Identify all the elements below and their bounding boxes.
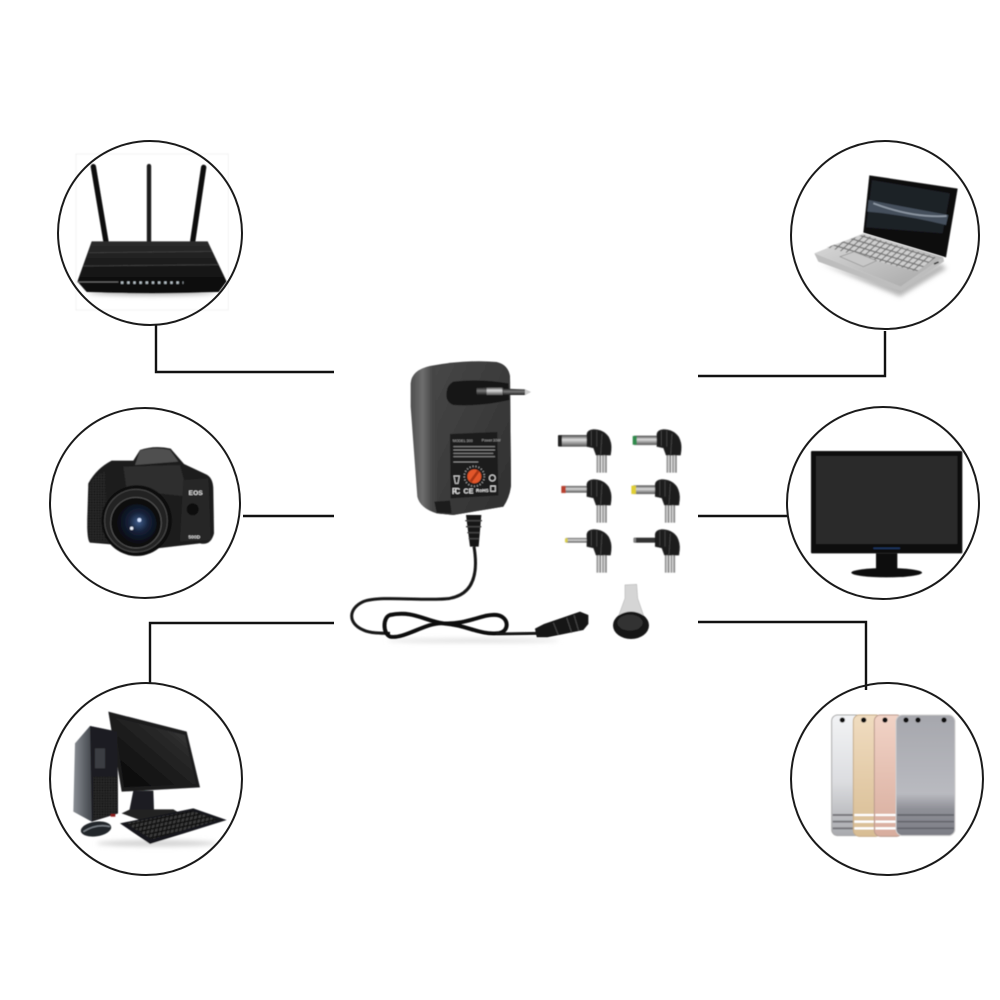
tip adapter key <box>613 584 649 639</box>
phone: silver <box>832 715 862 836</box>
adapter body <box>411 361 531 515</box>
rating label: CE <box>463 486 474 495</box>
rating label: Power:30W <box>482 438 501 442</box>
panel: smartphones <box>791 683 983 875</box>
rating label: MODEL:300 <box>453 439 473 443</box>
plug <box>446 380 531 405</box>
phone: gold <box>853 715 882 836</box>
rating label <box>450 432 501 498</box>
panel: monitor <box>787 407 979 599</box>
panel: power adapter with tips <box>352 361 681 643</box>
panel: DSLR camera: 500D <box>188 534 201 540</box>
panel: DSLR camera: EOS <box>189 490 203 497</box>
rating label: RoHS <box>476 488 489 493</box>
tip 1: silver <box>558 429 611 473</box>
panel: laptop <box>791 141 979 329</box>
tip 2: green <box>633 429 681 473</box>
connector: laptop to adapter <box>698 331 885 376</box>
rating label: FC <box>452 487 461 496</box>
phone: rose gold <box>874 715 903 836</box>
connector: camera to adapter <box>243 515 334 517</box>
connector: phones to adapter <box>698 622 866 690</box>
tip 3: red <box>561 479 611 523</box>
tip 5: small yellow <box>565 529 611 573</box>
connector: desktop PC to adapter <box>150 623 334 683</box>
panel: desktop computer <box>50 683 242 875</box>
phone: space gray <box>896 715 955 836</box>
panel: router <box>58 141 242 325</box>
adapter cable <box>352 515 588 643</box>
panel: DSLR camera <box>50 408 240 598</box>
connector: router to adapter <box>156 325 334 372</box>
connector: monitor to adapter <box>698 515 787 517</box>
tip 4: yellow <box>631 479 680 523</box>
tip 6: small dark <box>633 529 680 573</box>
